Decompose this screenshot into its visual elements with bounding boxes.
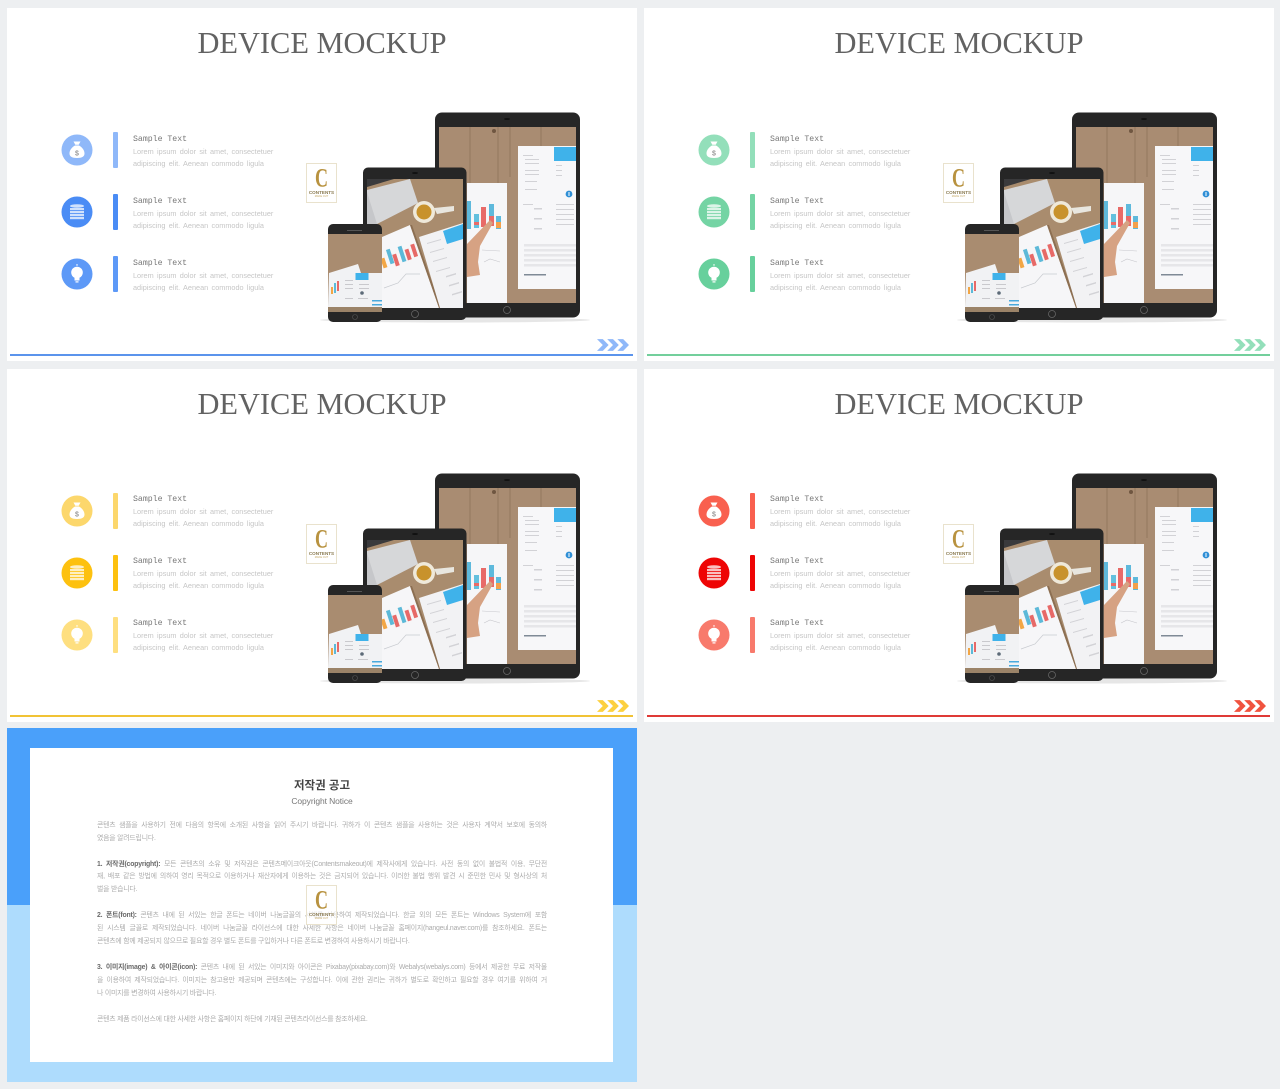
panel: blue device mockup <box>7 8 637 361</box>
heading: DEVICE MOCKUP <box>197 26 447 60</box>
clause 1: 1. 저작권(copyright): 모든 콘텐츠의 소유 및 저작권은 콘텐츠메이크아웃(Contentsmakeout)에 제작사에게 있습니다. 사전 동의 없이 불법적 이용, 무단전 <box>97 861 547 868</box>
list item: sample text 1: Lorem ipsum dolor sit amet, consectetuer <box>133 506 273 516</box>
logo <box>943 524 974 564</box>
list item: sample text 1: Lorem ipsum dolor sit amet, consectetuer <box>133 146 273 156</box>
panel: green device mockup <box>644 8 1274 361</box>
list item: sample text 2: adipiscing elit. Aenean commodo ligula <box>770 580 901 590</box>
notice title: 저작권 공고 <box>294 780 350 792</box>
logo <box>306 885 337 925</box>
logo: CONTENTS <box>309 190 334 195</box>
logo: C <box>952 525 965 554</box>
panel: copyright notice <box>7 728 637 1082</box>
list item: sample text 3: adipiscing elit. Aenean commodo ligula <box>770 642 901 652</box>
list item: sample text 1 <box>698 493 910 529</box>
list item: sample text 1: adipiscing elit. Aenean commodo ligula <box>133 518 264 528</box>
logo: C <box>952 164 965 193</box>
list item: sample text 2 <box>698 555 910 591</box>
list item: sample text 1 <box>62 493 274 529</box>
list item: sample text 2: Lorem ipsum dolor sit amet, consectetuer <box>133 208 273 218</box>
list item: sample text 2: Sample Text <box>770 197 824 206</box>
intro text line 2: 였음을 알려드립니다. <box>97 835 156 842</box>
clause 2 line 3: 콘텐츠에 함께 제공되지 않으므로 필요할 경우 별도 폰트를 구입하거나 다른 폰트로 변경하여 사용하시기 바랍니다. <box>97 938 410 945</box>
clause 1 line 3: 벌을 받습니다. <box>97 886 137 893</box>
logo: C <box>315 164 328 193</box>
arrows <box>597 339 629 351</box>
list item: sample text 2: adipiscing elit. Aenean commodo ligula <box>770 220 901 230</box>
list item: sample text 1: Lorem ipsum dolor sit amet, consectetuer <box>770 146 910 156</box>
clause 3 line 2: 을 이용하여 제작되었습니다. 이미지는 참고용만 제공되며 콘텐츠에는 구성합니다. 이에 관한 권리는 귀하가 별도로 확인하고 필요할 경우 여기를 위하여 거 <box>97 977 547 984</box>
device mockup image <box>958 474 1226 684</box>
logo: CONTENTS <box>946 551 971 556</box>
bottom line <box>10 354 633 356</box>
list item: sample text 1: adipiscing elit. Aenean commodo ligula <box>770 518 901 528</box>
light blue lower band <box>7 905 637 1082</box>
list item: sample text 2: Lorem ipsum dolor sit amet, consectetuer <box>133 568 273 578</box>
list item: sample text 1 <box>698 132 910 168</box>
heading: DEVICE MOCKUP <box>834 26 1084 60</box>
white notice card <box>30 748 613 1062</box>
bottom line <box>647 714 1270 717</box>
list item: sample text 1: adipiscing elit. Aenean commodo ligula <box>770 158 901 168</box>
list item: sample text 3 <box>62 617 274 653</box>
clause 2 line 2: 된 시스템 글꼴로 제작되었습니다. 네이버 나눔글꼴 라이선스에 대한 사세한 사항은 네이버 나눔글꼴 홈페이지(hangeul.naver.com)를 참조하세요. 폰트는 <box>97 925 547 932</box>
device mockup image <box>320 474 590 684</box>
arrows <box>1234 339 1266 351</box>
list item: sample text 2: Sample Text <box>133 557 187 566</box>
list item: sample text 3: Lorem ipsum dolor sit amet, consectetuer <box>133 270 273 280</box>
list item: sample text 3: adipiscing elit. Aenean commodo ligula <box>133 282 264 292</box>
list item: sample text 1: Lorem ipsum dolor sit amet, consectetuer <box>770 506 910 516</box>
list item: sample text 2: adipiscing elit. Aenean commodo ligula <box>133 580 264 590</box>
logo: C <box>315 525 328 554</box>
list item: sample text 1 <box>62 132 274 168</box>
list item: sample text 3: Sample Text <box>770 259 824 268</box>
list item: sample text 2: Sample Text <box>133 197 187 206</box>
logo: CONTENTS <box>946 190 971 195</box>
logo: MAKE OUT <box>952 556 965 559</box>
logo: CONTENTS <box>309 551 334 556</box>
clause 3 line 3: 나 이미지를 변경하여 사용하시기 바랍니다. <box>97 990 216 997</box>
list item: sample text 3: Lorem ipsum dolor sit amet, consectetuer <box>133 630 273 640</box>
arrows <box>1234 700 1266 712</box>
logo <box>306 524 337 564</box>
list item: sample text 2: Lorem ipsum dolor sit amet, consectetuer <box>770 208 910 218</box>
logo: C <box>315 886 328 915</box>
logo: MAKE OUT <box>315 195 328 198</box>
list item: sample text 1: adipiscing elit. Aenean commodo ligula <box>133 158 264 168</box>
list item: sample text 3: Lorem ipsum dolor sit amet, consectetuer <box>770 270 910 280</box>
arrows <box>597 700 629 712</box>
list item: sample text 2 <box>62 194 274 230</box>
device mockup image <box>320 112 590 322</box>
list item: sample text 2 <box>62 555 274 591</box>
logo <box>306 163 337 203</box>
list item: sample text 3: adipiscing elit. Aenean commodo ligula <box>133 642 264 652</box>
list item: sample text 3: adipiscing elit. Aenean commodo ligula <box>770 282 901 292</box>
list item: sample text 2: Lorem ipsum dolor sit amet, consectetuer <box>770 568 910 578</box>
list item: sample text 3: Sample Text <box>133 619 187 628</box>
list item: sample text 3: Lorem ipsum dolor sit amet, consectetuer <box>770 630 910 640</box>
list item: sample text 2: Sample Text <box>770 557 824 566</box>
logo: MAKE OUT <box>952 195 965 198</box>
list item: sample text 1: Sample Text <box>770 135 824 144</box>
heading: DEVICE MOCKUP <box>197 387 447 421</box>
bottom line <box>647 354 1270 356</box>
clause 1 line 2: 재, 배포 같은 방법에 의하여 영리 목적으로 이용하거나 재산자에게 이용하는 것은 금지되어 있습니다. 이러한 불법 행위 발견 시 준민한 민사 및 형사상의 처 <box>97 873 547 880</box>
intro text: 콘텐츠 샘플을 사용하기 전에 다음의 항목에 소개된 사항을 읽어 주시기 바랍니다. 귀하가 이 콘텐츠 샘플을 사용하는 것은 사용자 계약서 보호에 동의하 <box>97 822 547 829</box>
panel: yellow device mockup <box>7 369 637 722</box>
heading: DEVICE MOCKUP <box>834 387 1084 421</box>
logo <box>943 163 974 203</box>
logo: CONTENTS <box>309 912 334 917</box>
list item: sample text 1: Sample Text <box>133 495 187 504</box>
panel: red device mockup <box>644 369 1274 722</box>
list item: sample text 3: Sample Text <box>133 259 187 268</box>
clause 3: 3. 이미지(image) & 아이콘(icon): 콘텐츠 내에 된 서있는 이미지와 아이콘은 Pixabay(pixabay.com)와 Webalys(webalys.com) 등에서 제공한 무료 저작물 <box>97 964 547 971</box>
clause 2: 2. 폰트(font): 콘텐츠 내에 된 서있는 한글 폰트는 네이버 나눔글꼴의 서체를 사용하여 제작되었습니다. 한글 외의 모든 폰트는 Windows System에 포함 <box>97 912 547 919</box>
logo: MAKE OUT <box>315 556 328 559</box>
list item: sample text 3 <box>698 617 910 653</box>
list item: sample text 3 <box>62 256 274 292</box>
list item: sample text 1: Sample Text <box>133 135 187 144</box>
notice subtitle: Copyright Notice <box>291 796 353 806</box>
list item: sample text 3 <box>698 256 910 292</box>
device mockup image <box>958 112 1226 322</box>
list item: sample text 1: Sample Text <box>770 495 824 504</box>
logo: MAKE OUT <box>315 917 328 920</box>
bottom line <box>10 714 633 717</box>
closing line: 콘텐츠 제품 라이선스에 대한 사세한 사항은 홈페이지 하단에 기재된 콘텐츠라이선스를 참조하세요. <box>97 1016 368 1023</box>
list item: sample text 2: adipiscing elit. Aenean commodo ligula <box>133 220 264 230</box>
list item: sample text 2 <box>698 194 910 230</box>
list item: sample text 3: Sample Text <box>770 619 824 628</box>
